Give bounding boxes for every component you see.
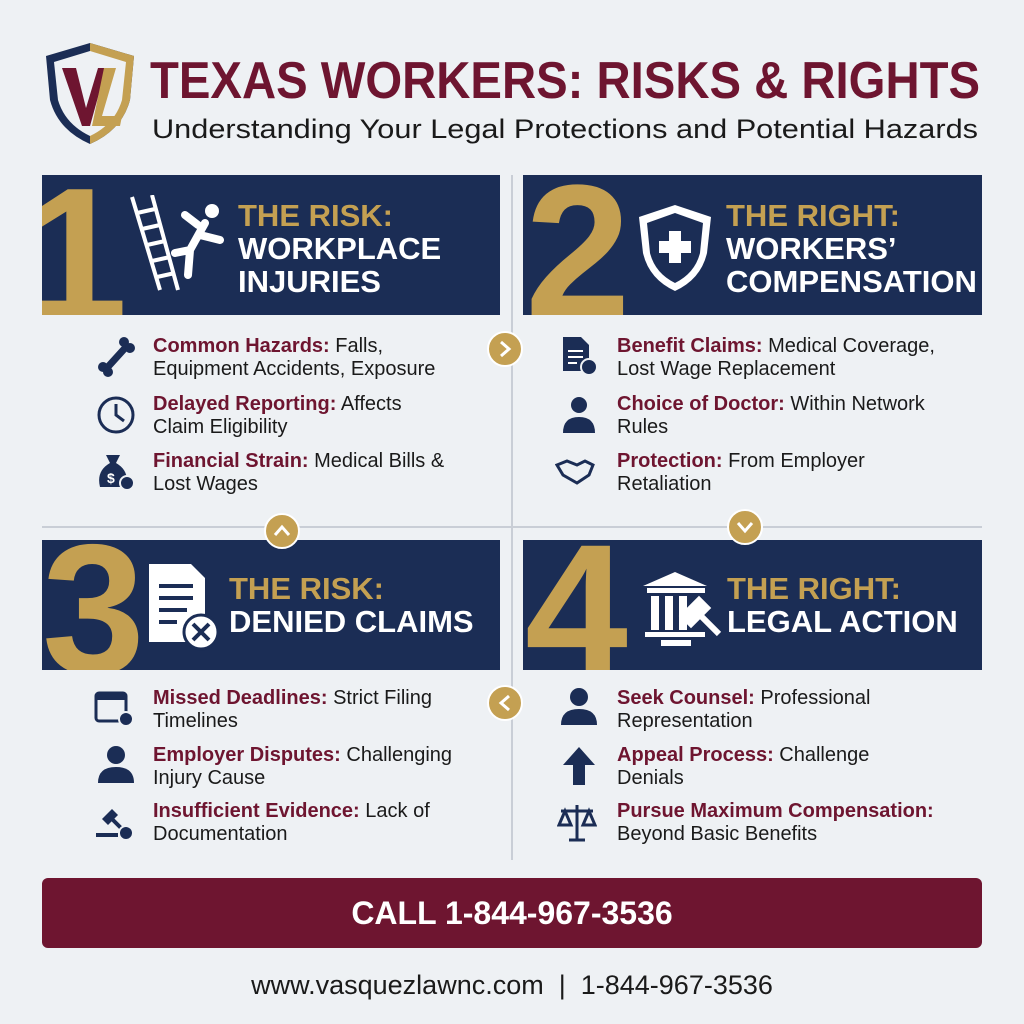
icon: courthouse gavel bbox=[643, 572, 722, 646]
section 3 items bbox=[94, 687, 452, 845]
icon: ladder fall bbox=[130, 195, 224, 291]
heading: DENIED CLAIMS bbox=[229, 604, 474, 639]
heading bbox=[727, 571, 958, 639]
section 1 items: Delayed Reporting: Affects bbox=[153, 393, 402, 415]
footer: www.vasquezlawnc.com | 1-844-967-3536 bbox=[251, 970, 773, 1000]
section 2 items: Choice of Doctor: Within Network bbox=[617, 393, 925, 415]
heading: THE RIGHT: bbox=[726, 198, 900, 233]
icon: handshake bbox=[555, 459, 595, 485]
icon: gavel bbox=[96, 809, 132, 839]
icon: document x bbox=[149, 564, 216, 648]
section 3 items: Missed Deadlines: Strict Filing bbox=[153, 687, 432, 709]
icon: document check bbox=[563, 337, 596, 374]
icon: money bag bbox=[99, 455, 133, 489]
section 3 items: Documentation bbox=[153, 823, 288, 845]
divider vertical bbox=[511, 175, 513, 860]
heading: THE RISK: bbox=[238, 198, 393, 233]
icon: scales bbox=[557, 805, 597, 842]
CTA bar bbox=[42, 878, 982, 948]
section 4 items: Seek Counsel: Professional bbox=[617, 687, 870, 709]
section 4 items: Pursue Maximum Compensation: bbox=[617, 800, 934, 822]
section 4 items: Denials bbox=[617, 767, 684, 789]
nav circles bbox=[487, 331, 523, 367]
section 1 items: Common Hazards: Falls, bbox=[153, 335, 383, 357]
section 4 items: Representation bbox=[617, 710, 753, 732]
title: Understanding Your Legal Protections and Potential Hazards bbox=[152, 114, 978, 144]
icon: money bag: $ bbox=[107, 470, 115, 486]
icon: bone bbox=[98, 337, 135, 377]
icon: counsel bbox=[561, 688, 597, 725]
section 3 items: Employer Disputes: Challenging bbox=[153, 744, 452, 766]
icon: up arrow bbox=[563, 747, 595, 785]
heading: INJURIES bbox=[238, 264, 381, 299]
section 1 items: Claim Eligibility bbox=[153, 416, 287, 438]
icon: shield cross bbox=[639, 205, 711, 291]
section 4 items bbox=[557, 687, 934, 845]
heading: WORKPLACE bbox=[238, 231, 441, 266]
icon: calendar bbox=[94, 692, 132, 725]
heading: COMPENSATION bbox=[726, 264, 977, 299]
heading bbox=[229, 571, 474, 639]
icon: employer bbox=[98, 746, 134, 783]
section 1 items: Equipment Accidents, Exposure bbox=[153, 358, 435, 380]
section 2 items: Rules bbox=[617, 416, 668, 438]
section 3 items: Injury Cause bbox=[153, 767, 265, 789]
section 1 items: Lost Wages bbox=[153, 473, 258, 495]
section 1 items: Financial Strain: Medical Bills & bbox=[153, 450, 444, 472]
logo shield bbox=[46, 43, 134, 144]
heading: THE RIGHT: bbox=[727, 571, 901, 606]
section 2 items: Protection: From Employer bbox=[617, 450, 865, 472]
heading bbox=[726, 198, 977, 299]
divider horizontal bbox=[42, 526, 982, 528]
section 2 items: Retaliation bbox=[617, 473, 712, 495]
section 1 items bbox=[98, 335, 444, 495]
icon: clock bbox=[98, 396, 134, 434]
section 2 items: Lost Wage Replacement bbox=[617, 358, 835, 380]
section 4 items: Appeal Process: Challenge bbox=[617, 744, 869, 766]
panel 1 bbox=[42, 175, 500, 315]
section 2 items: Benefit Claims: Medical Coverage, bbox=[617, 335, 935, 357]
section 3 items: Timelines bbox=[153, 710, 238, 732]
section 3 items: Insufficient Evidence: Lack of bbox=[153, 800, 430, 822]
CTA bar: CALL 1-844-967-3536 bbox=[351, 895, 673, 931]
title bbox=[150, 52, 980, 144]
icon: doctor bbox=[563, 397, 595, 433]
panel 4 bbox=[523, 540, 982, 670]
heading: LEGAL ACTION bbox=[727, 604, 958, 639]
heading: WORKERS’ bbox=[726, 231, 896, 266]
heading bbox=[238, 198, 441, 299]
panel 2 bbox=[523, 175, 982, 315]
heading: THE RISK: bbox=[229, 571, 384, 606]
section 4 items: Beyond Basic Benefits bbox=[617, 823, 817, 845]
section 2 items bbox=[555, 335, 935, 495]
panel 3 bbox=[42, 540, 500, 670]
